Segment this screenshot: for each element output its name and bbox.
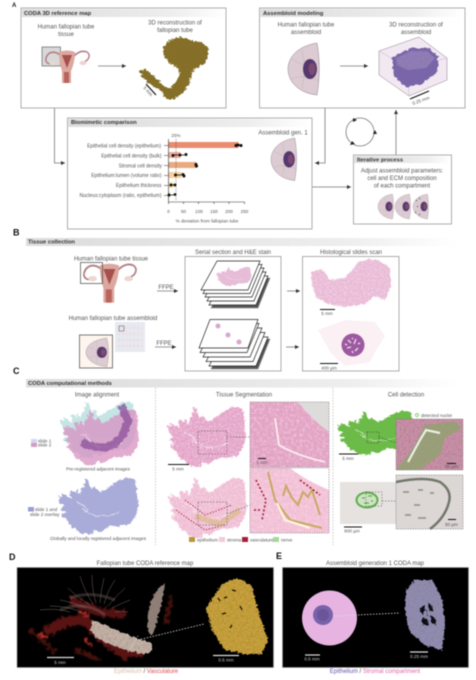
legend: slide 1 and slide 2 — [31, 438, 52, 448]
legend: overlay — [28, 507, 60, 517]
3D fallopian tube model — [139, 37, 208, 100]
text: human fallopian tube assembloid: Human fallopian tube — [278, 22, 334, 28]
arrow: bottom slides to scan — [286, 346, 299, 348]
icon: half-sphere assembloid — [288, 43, 319, 95]
text: Assembloid gen. 1: Assembloid gen. 1 — [258, 130, 308, 136]
column: cell detection — [337, 392, 463, 534]
legend: tissue classes: nerve — [281, 538, 293, 542]
axis tick labels: 100 — [195, 209, 203, 214]
tube body — [90, 584, 165, 654]
category labels: Epithelium thickness — [116, 183, 162, 189]
segmented section — [168, 478, 246, 537]
pale epithelium fronds — [40, 575, 130, 615]
text: adjust assembloid parameters: of each compartment — [374, 184, 431, 190]
scale bar: 5 mm: 5 mm — [54, 660, 66, 665]
caption: epithelium / vasculature: Epithelium / Vasculature — [114, 669, 179, 675]
scale bar: 800 um: 800 µm — [344, 528, 360, 534]
registered overlay — [58, 478, 138, 534]
dashed connector — [334, 613, 400, 616]
bar chart: % deviation from fallopian tube — [80, 133, 249, 224]
icon: assembloid gen. 1 — [271, 138, 297, 181]
scale bar: 5 mm — [168, 464, 189, 472]
column: image alignment — [28, 392, 147, 541]
zoom boxes and connectors — [198, 431, 250, 525]
tissue scan — [311, 259, 391, 307]
panel: Tissue collection — [26, 238, 456, 371]
scale bar: 0.5 mm: 0.5 mm — [218, 658, 234, 662]
panel label E: E — [276, 551, 282, 561]
scale bar: 5 mm — [47, 658, 74, 665]
scale bar: 400 um: 400 µm — [321, 366, 337, 370]
heading: histological slides scan: Histological slides scan — [320, 250, 382, 256]
slide stack: tissue — [201, 261, 270, 308]
inset: H&E — [250, 402, 329, 467]
scale bar: 5 mm: 5 mm — [342, 456, 354, 461]
assembloid sphere — [302, 590, 357, 646]
heading: Iterative process: Iterative process — [357, 158, 403, 164]
text: FFPE and arrow, tissue: FFPE — [158, 285, 174, 291]
scale bar: 0.25 mm: 0.25 mm — [410, 654, 428, 659]
icon: cycle arrows — [346, 118, 377, 146]
text: 3D reconstruction of assembloid: 3D reconstruction of — [389, 22, 443, 28]
axis tick labels: 250 — [241, 209, 249, 214]
legend: detected nuclei: detected nuclei — [421, 413, 452, 418]
arrow — [98, 65, 126, 67]
panel: histological slides scan — [302, 250, 399, 371]
heading: CODA 3D reference map: CODA 3D reference map — [24, 11, 92, 17]
text: human fallopian tube tissue: Human fallopian tube tissue — [74, 256, 149, 262]
scale bar: 5 mm: 5 mm — [321, 311, 333, 316]
panel: fallopian tube 3D render — [17, 568, 274, 668]
panel: assembloid 3D render — [282, 568, 468, 668]
panel: Biomimetic comparison — [68, 118, 312, 229]
text: human fallopian tube assembloid: Human fallopian tube assembloid — [69, 316, 157, 322]
panel: CODA computational methods — [26, 379, 463, 545]
heading: assembloid generation 1 CODA map: Assembloid generation 1 CODA map — [326, 561, 425, 567]
dashed connector — [128, 624, 204, 652]
legend: overlay: slide 1 and — [35, 507, 58, 512]
scale bar: 5 mm — [339, 454, 358, 461]
green detected-cell map — [337, 411, 414, 455]
category labels: Stromal cell density — [119, 164, 162, 170]
scale bar: 5 mm: 5 mm — [172, 466, 184, 472]
inset: detected cells in assembloid — [396, 475, 463, 529]
text: 3D reconstruction of fallopian tube: fallopian tube — [157, 28, 194, 34]
panel: Iterative process — [354, 155, 452, 224]
heading: serial section and H&E stain: Serial section and H&E stain — [195, 250, 271, 256]
pre-registered overlay — [60, 402, 139, 465]
inset: detected cells in assembloid: 50 µm — [445, 522, 458, 527]
category labels: Epithelial cell density (epithelium) — [87, 144, 161, 150]
heading: fallopian tube CODA reference map: Fallopian tube CODA reference map — [97, 561, 194, 567]
red vasculature — [30, 595, 172, 660]
legend: tissue classes: stroma — [227, 538, 241, 542]
text: adjust assembloid parameters: cell and ECM composition — [367, 176, 437, 182]
text: 3D reconstruction of fallopian tube: 3D reconstruction of — [148, 20, 202, 26]
text: adjust assembloid parameters: Adjust assembloid parameters: — [361, 168, 443, 174]
text: human fallopian tube tissue: tissue — [58, 32, 74, 38]
heading: CODA computational methods: CODA computational methods — [28, 381, 112, 387]
column: tissue segmentation — [167, 392, 329, 542]
legend: tissue classes — [189, 537, 293, 542]
scale bar: 0.5 mm: 0.5 mm — [304, 656, 320, 662]
bars — [168, 142, 238, 198]
caption: epithelium / stromal compartment: Epithelium / Stromal compartment — [330, 669, 421, 675]
inset: H&E: 1 mm — [256, 460, 268, 465]
legend: slide 1 and slide 2: slide 1 — [38, 438, 52, 444]
caption: pre-registered adjacent images: Pre-registered adjacent images — [66, 466, 131, 472]
text: FFPE and arrow, assembloid: FFPE — [156, 341, 172, 347]
category labels — [80, 144, 162, 199]
axis tick labels: 200 — [225, 209, 233, 214]
panel: Assembloid modeling — [260, 8, 465, 108]
assembloid overview — [340, 482, 396, 524]
legend: overlay: slide 2 overlay — [30, 512, 60, 517]
category labels: Epithelial cell density (bulk) — [101, 154, 162, 160]
legend: slide 1 and slide 2: slide 2 — [38, 442, 52, 448]
panel label A: A — [12, 3, 17, 9]
axis title: % deviation from fallopian tube — [176, 218, 239, 224]
scale bar: 0.5 mm — [213, 656, 239, 662]
scale bar: 5 mm: 5 mm — [142, 85, 154, 97]
panel: CODA 3D reference map — [21, 8, 226, 108]
category labels: Epithelium:lumen (volume ratio) — [91, 173, 162, 179]
panel label D: D — [9, 552, 16, 562]
category labels: Nucleus:cytoplasm (ratio, epithelium) — [80, 193, 162, 199]
axis tick labels — [167, 209, 249, 214]
scale bar: 0.25 mm — [410, 91, 430, 106]
text: human fallopian tube tissue: Human fallopian tube — [38, 24, 94, 30]
caption: globally and locally registered adjacent images: Globally and locally registered adjacent images — [50, 536, 147, 541]
panel label B: B — [13, 228, 20, 238]
inset: detected nuclei in tissue: 50 µm — [445, 464, 458, 469]
golden zoomed epithelium — [206, 578, 268, 654]
icon: uterus with highlighted fallopian tube — [42, 47, 89, 83]
data points with error bars — [168, 144, 242, 196]
text: 25% threshold: 25% — [171, 133, 181, 138]
scale bar: 0.25 mm: 0.25 mm — [412, 95, 430, 106]
legend: tissue classes: epithelium — [197, 538, 218, 542]
heading: cell detection: Cell detection — [388, 392, 424, 398]
connector arrows between panel A boxes — [54, 108, 396, 187]
heading: Biomimetic comparison: Biomimetic comparison — [71, 120, 137, 126]
arrow: top slides to scan — [287, 290, 300, 292]
arrow — [340, 65, 368, 67]
epithelium render — [405, 580, 445, 650]
icon: assembloid in box — [80, 335, 112, 368]
icon: well plate — [115, 322, 145, 352]
assembloid scan — [318, 320, 385, 366]
heading: image alignment: Image alignment — [75, 392, 120, 398]
text: human fallopian tube assembloid: assembloid — [291, 30, 321, 36]
heading: Assembloid modeling: Assembloid modeling — [263, 11, 324, 17]
inset: detected nuclei in tissue — [396, 419, 463, 470]
text: 3D reconstruction of assembloid: assembloid — [401, 30, 431, 36]
panel: serial section — [185, 250, 281, 371]
legend: tissue classes: vasculature — [250, 538, 274, 542]
panel label C: C — [13, 366, 20, 376]
H&E section — [167, 407, 245, 466]
icons: assembloid variants — [378, 194, 429, 219]
axis tick labels: 150 — [210, 209, 218, 214]
inset: segmentation — [250, 468, 329, 533]
axis tick labels: 0 — [167, 209, 170, 214]
axis tick labels: 50 — [181, 209, 186, 214]
heading: Tissue collection: Tissue collection — [28, 240, 75, 246]
slide stack: assembloid — [199, 320, 270, 369]
heading: tissue segmentation: Tissue Segmentation — [216, 392, 272, 398]
3D assembloid in bounding box — [379, 37, 447, 96]
icon: uterus — [80, 262, 136, 303]
scale bar: 800 um — [344, 527, 362, 534]
